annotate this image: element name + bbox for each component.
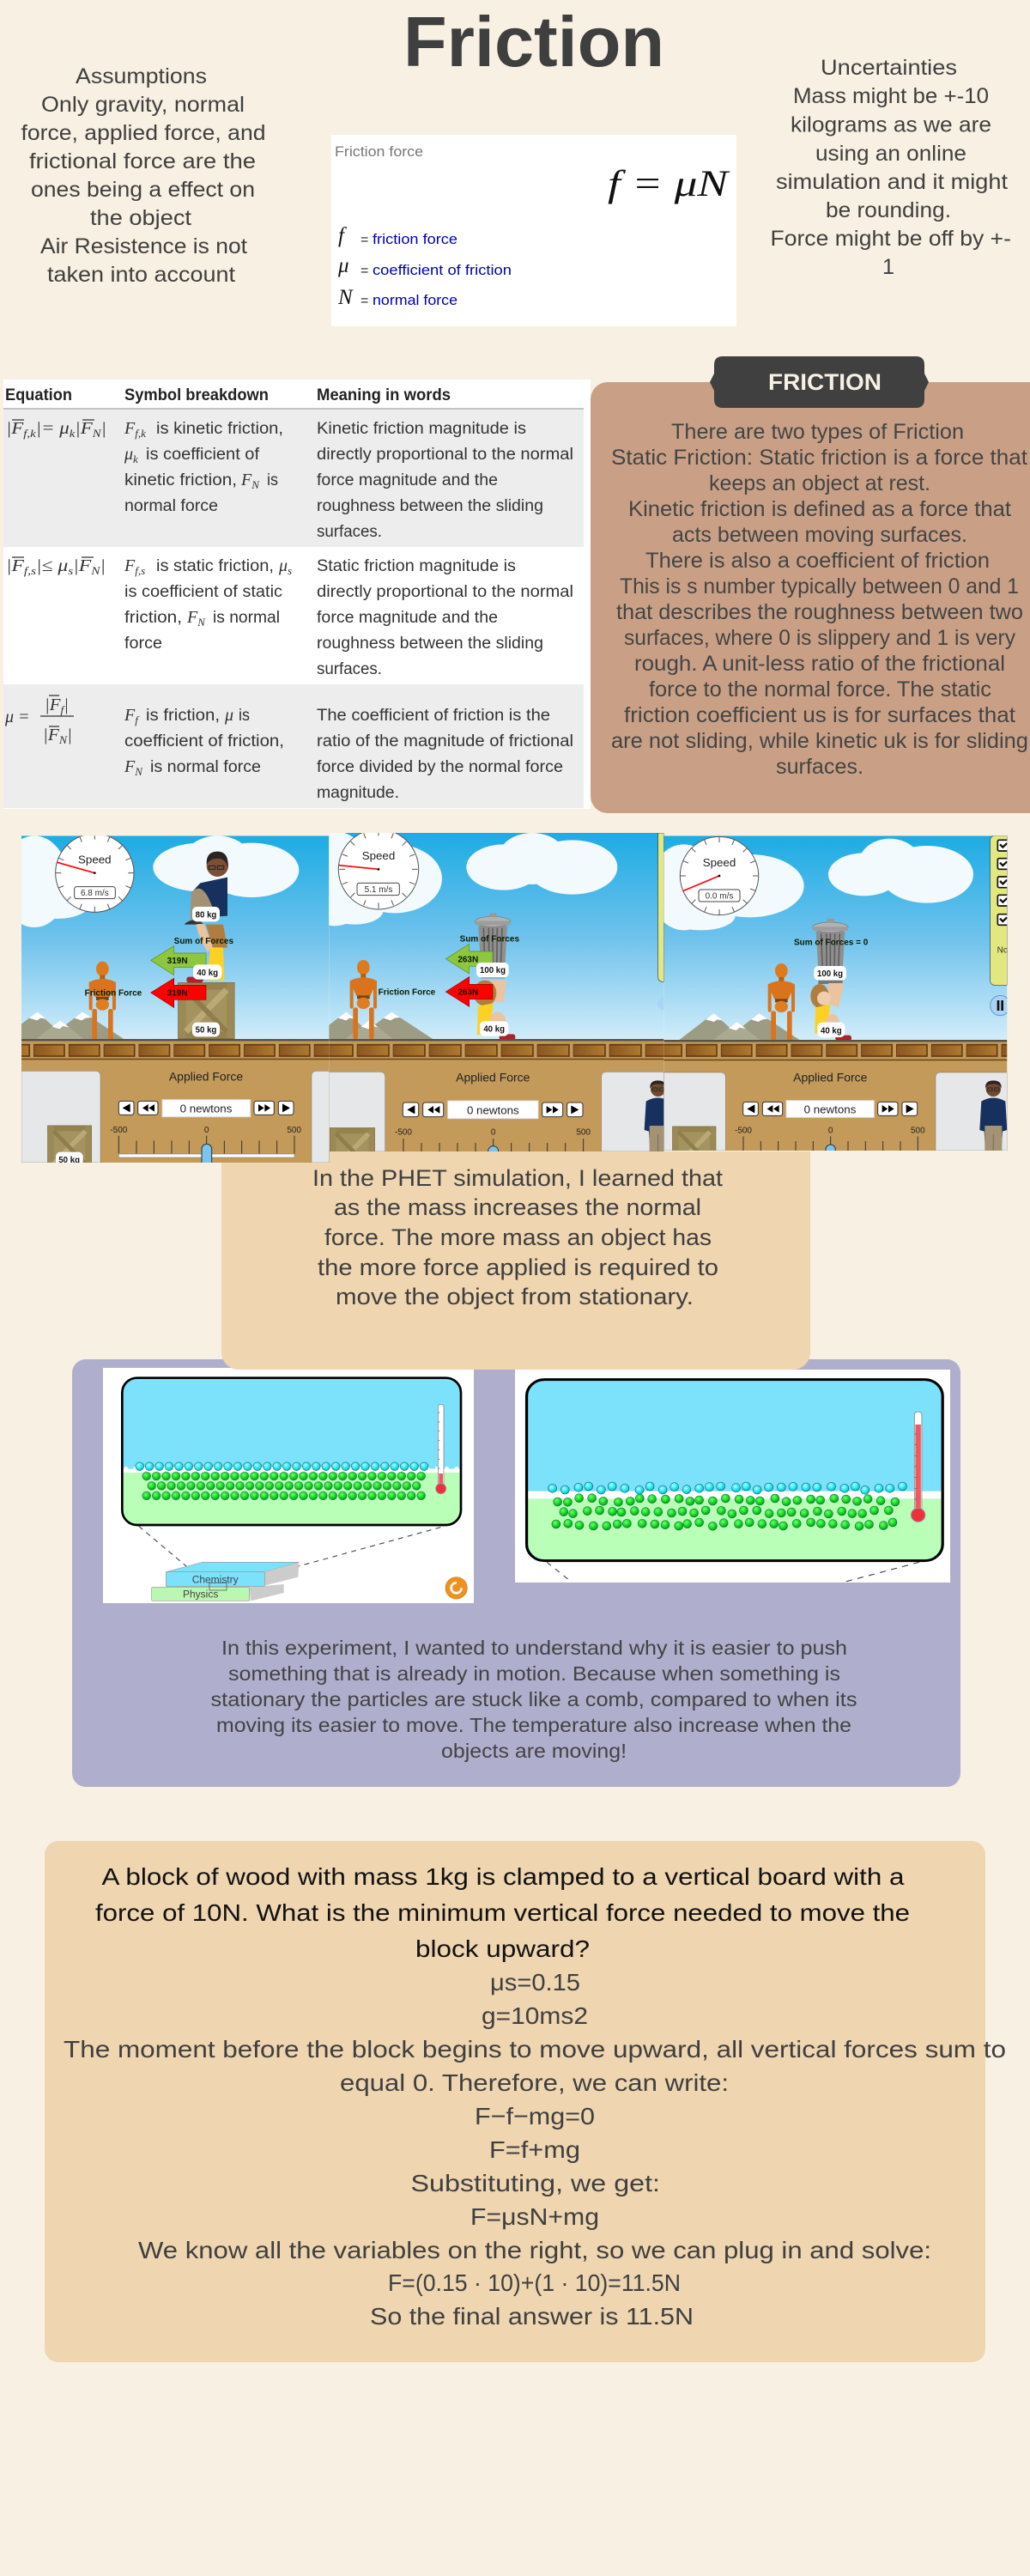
table header xyxy=(5,386,451,404)
row: static friction: friction, xyxy=(124,609,182,627)
row: static friction: N xyxy=(197,616,206,629)
text block: assumptions: frictional force are the xyxy=(29,149,256,173)
legend: mu: μ xyxy=(337,254,349,277)
text block: uncertainties: be rounding. xyxy=(826,198,951,222)
row: static friction: s xyxy=(68,564,73,577)
friction force arrow xyxy=(85,978,206,1007)
figure: seated girl xyxy=(186,924,227,982)
table header: Symbol breakdown xyxy=(124,386,269,404)
text block: assumptions: Air Resistence is not xyxy=(40,234,247,258)
row: static friction: directly proportional to the normal xyxy=(317,583,573,601)
books: chemistry and physics xyxy=(152,1562,299,1601)
text block: assumptions: ones being a effect on xyxy=(31,178,255,202)
mass labels xyxy=(192,907,221,1036)
legend: N xyxy=(337,286,457,309)
row: kinetic friction: is xyxy=(267,471,278,489)
sum of forces arrow: Sum of Forces xyxy=(174,937,233,946)
row: kinetic friction: N xyxy=(92,427,102,440)
green particles xyxy=(552,1494,900,1530)
legend: f: f xyxy=(338,224,347,247)
row: kinetic friction: normal force xyxy=(124,497,218,515)
simulation screenshot 2: trash can and girl, moving xyxy=(329,833,664,1151)
row: coefficient of friction: N xyxy=(58,733,69,746)
control deck: 500 xyxy=(911,1126,925,1135)
explanation text: surfaces, where 0 is slippery and 1 is very xyxy=(624,626,1015,650)
trash can xyxy=(813,919,848,984)
books: chemistry and physics: Chemistry xyxy=(192,1574,239,1586)
mountains xyxy=(329,1012,433,1041)
explanation text: that describes the roughness between two xyxy=(616,600,1023,624)
ground and bricks xyxy=(21,1039,329,1061)
row: static friction: | xyxy=(100,556,106,575)
mannequin: friction pusher xyxy=(89,962,116,1041)
takeaway text: In the PHET simulation, I learned that xyxy=(312,1165,724,1191)
chamber: still particles xyxy=(122,1378,461,1525)
text block: assumptions: taken into account xyxy=(47,263,235,287)
speed gauge: Speed xyxy=(78,854,112,866)
explanation text: friction coefficient us is for surfaces that xyxy=(624,703,1015,727)
solution steps: g=10ms2 xyxy=(482,2002,588,2029)
mountains xyxy=(680,1013,800,1040)
formula caption: Friction force xyxy=(335,143,423,160)
row: coefficient of friction: ratio of the magnitude of frictional xyxy=(317,732,573,750)
row: static friction: F xyxy=(124,556,135,575)
row: static friction: roughness between the sliding xyxy=(317,635,543,653)
solution steps: The moment before the block begins to move upward, all vertical forces sum to xyxy=(64,2036,1006,2063)
panel: particle experiment xyxy=(72,1359,960,1787)
title: Friction xyxy=(403,2,664,82)
legend: f: friction force xyxy=(373,231,457,247)
mass labels: 100 kg xyxy=(817,969,843,979)
row: coefficient of friction: μ xyxy=(224,706,233,725)
panel: PHET simulation takeaway xyxy=(221,1151,810,1370)
row: kinetic friction: N xyxy=(251,478,260,491)
row: kinetic friction: force magnitude and the xyxy=(317,471,498,489)
row: static friction: s xyxy=(288,564,292,577)
text block: uncertainties: 1 xyxy=(882,255,894,279)
pause button xyxy=(991,995,1010,1016)
legend: N: normal force xyxy=(373,292,457,308)
row: kinetic friction: is coefficient of xyxy=(146,446,260,464)
legend: N: = xyxy=(360,294,368,308)
sum of forces label: Sum of Forces = 0 xyxy=(794,939,869,948)
control deck: -500 xyxy=(110,1126,128,1135)
row: kinetic friction: |= μ xyxy=(36,419,70,438)
row: kinetic friction: k xyxy=(133,453,138,465)
friction force arrow: Friction Force xyxy=(379,988,436,998)
legend: mu xyxy=(337,254,512,278)
text block: assumptions xyxy=(21,64,266,287)
speed gauge xyxy=(338,829,419,909)
row: kinetic friction: roughness between the sliding xyxy=(317,497,543,515)
figure: seated man xyxy=(185,852,228,925)
clouds xyxy=(650,839,973,930)
row: static friction xyxy=(6,556,573,678)
text block: uncertainties: Mass might be +-10 xyxy=(793,84,989,108)
icon: reset button xyxy=(445,1577,467,1599)
control deck: 0 xyxy=(491,1128,496,1138)
crate xyxy=(178,982,234,1039)
experiment text: moving its easier to move. The temperature also increase when the xyxy=(216,1714,851,1736)
row: kinetic friction: kinetic friction, xyxy=(124,471,237,489)
control deck: -500 xyxy=(735,1126,752,1135)
mass labels: 40 kg xyxy=(821,1026,842,1036)
trash can xyxy=(475,913,511,978)
row: static friction: Static friction magnitude is xyxy=(317,557,516,575)
experiment text: something that is already in motion. Because when something is xyxy=(228,1662,840,1685)
friction force arrow: Friction Force xyxy=(85,989,142,999)
control deck: Applied Force xyxy=(793,1070,868,1084)
row: kinetic friction: μ xyxy=(124,445,133,464)
clouds xyxy=(329,833,618,926)
control deck xyxy=(21,1060,329,1170)
speed gauge: 5.1 m/s xyxy=(365,885,392,895)
explanation text: acts between moving surfaces. xyxy=(672,523,967,547)
row: coefficient of friction: is normal force xyxy=(150,758,261,776)
text block: uncertainties: simulation and it might xyxy=(776,170,1008,194)
text block: uncertainties: Uncertainties xyxy=(821,56,957,80)
row: coefficient of friction: force divided by the normal force xyxy=(317,758,563,776)
row: kinetic friction: is kinetic friction, xyxy=(156,420,283,438)
explanation text: are not sliding, while kinetic uk is for sliding xyxy=(611,729,1028,753)
mass labels: 40 kg xyxy=(483,1025,505,1035)
control deck: 0 newtons xyxy=(467,1103,519,1116)
control strip edge xyxy=(657,833,664,1010)
explanation text xyxy=(611,420,1028,779)
row: coefficient of friction: |F xyxy=(43,726,58,744)
solution steps: equal 0. Therefore, we can write: xyxy=(340,2069,729,2096)
solution steps: F=f+mg xyxy=(489,2136,580,2163)
solution steps: Substituting, we get: xyxy=(410,2170,660,2196)
row: coefficient of friction: magnitude. xyxy=(317,784,399,802)
speed gauge: 6.8 m/s xyxy=(81,889,109,898)
control deck: 0 xyxy=(204,1126,209,1135)
control deck: 0 newtons xyxy=(804,1103,857,1115)
control deck: 0 xyxy=(828,1126,833,1135)
diagram: moving particles xyxy=(515,1370,950,1583)
mass labels: 50 kg xyxy=(196,1026,216,1036)
explanation text: Kinetic friction is defined as a force that xyxy=(628,497,1011,521)
control panel: force options: No xyxy=(997,946,1009,956)
solution steps: So the final answer is 11.5N xyxy=(370,2303,694,2330)
row: kinetic friction: surfaces. xyxy=(317,523,382,541)
figure: seated girl xyxy=(810,983,851,1041)
row: kinetic friction: f,k xyxy=(135,427,146,440)
control deck: 500 xyxy=(576,1128,591,1138)
row: coefficient of friction: F xyxy=(124,757,135,776)
row: kinetic friction: | xyxy=(101,419,106,438)
row: kinetic friction: f,k xyxy=(23,427,36,440)
main formula: f = μN xyxy=(608,164,730,204)
row: kinetic friction: Kinetic friction magnitude is xyxy=(317,420,526,438)
speed gauge: Speed xyxy=(703,856,736,869)
table header: Equation xyxy=(5,386,72,404)
text block: assumptions: the object xyxy=(90,206,191,230)
control deck: -500 xyxy=(395,1128,412,1138)
row: kinetic friction: F xyxy=(241,471,251,489)
books: chemistry and physics: Physics xyxy=(183,1588,218,1600)
speed gauge: 0.0 m/s xyxy=(706,891,733,901)
row: static friction: surfaces. xyxy=(317,660,382,678)
row: static friction: force magnitude and the xyxy=(317,609,498,627)
control deck: Applied Force xyxy=(456,1070,530,1084)
speed gauge xyxy=(680,836,759,915)
panel: friction force formula xyxy=(331,135,736,326)
problem statement: block upward? xyxy=(415,1935,590,1962)
solution steps: F=μsN+mg xyxy=(470,2203,599,2230)
row: static friction: |F xyxy=(6,556,21,575)
row: coefficient of friction: The coefficient of friction is the xyxy=(317,707,550,725)
explanation text: keeps an object at rest. xyxy=(709,471,930,495)
mass labels: 40 kg xyxy=(197,969,218,978)
control deck: 500 xyxy=(287,1126,301,1135)
text block: assumptions: Assumptions xyxy=(76,64,207,88)
row: static friction: f,s xyxy=(135,564,145,577)
row: kinetic friction: |F xyxy=(6,419,21,438)
row: coefficient of friction: N xyxy=(134,765,143,778)
explanation text: rough. A unit-less ratio of the frictional xyxy=(634,652,1005,676)
solution steps: F−f−mg=0 xyxy=(475,2103,595,2129)
friction force arrow: 319N xyxy=(167,989,188,999)
dashed zoom lines xyxy=(139,1526,440,1582)
control deck: Applied Force xyxy=(169,1069,243,1083)
ground and bricks xyxy=(663,1040,1007,1062)
experiment text: stationary the particles are stuck like a comb, compared to when its xyxy=(211,1688,857,1710)
takeaway text: the more force applied is required to xyxy=(318,1255,718,1280)
row: kinetic friction xyxy=(6,419,573,541)
explanation text: This is s number typically between 0 and 1 xyxy=(620,574,1019,598)
row: kinetic friction: k xyxy=(70,427,76,440)
friction badge xyxy=(710,356,929,408)
row: static friction: is coefficient of static xyxy=(124,583,282,601)
sum of forces arrow: Sum of Forces xyxy=(460,934,519,944)
row: static friction: N xyxy=(90,564,101,577)
explanation text: There are two types of Friction xyxy=(671,420,964,444)
takeaway text: as the mass increases the normal xyxy=(334,1194,701,1220)
legend: f xyxy=(338,224,457,247)
friction force arrow: 263N xyxy=(457,988,478,998)
mannequin: friction pusher xyxy=(768,963,795,1042)
panel: friction explanation xyxy=(591,356,1030,813)
friction force arrow xyxy=(379,977,493,1006)
row: coefficient of friction: f xyxy=(135,714,140,726)
table header: Meaning in words xyxy=(317,386,451,404)
control deck: 50 kg xyxy=(58,1156,80,1165)
row: static friction: F xyxy=(187,608,197,627)
row: static friction: is normal xyxy=(213,609,280,627)
solution steps: We know all the variables on the right, so we can plug in and solve: xyxy=(138,2237,931,2263)
text block: assumptions: force, applied force, and xyxy=(21,121,266,145)
row: static friction: f,s xyxy=(24,564,36,577)
row: coefficient of friction: | xyxy=(64,696,69,714)
row: kinetic friction: |F xyxy=(75,419,94,438)
control deck xyxy=(329,1060,664,1151)
control deck xyxy=(663,1060,1008,1151)
row: coefficient of friction: coefficient of friction, xyxy=(124,732,284,750)
row: static friction: force xyxy=(124,635,162,653)
simulation screenshot 1: crate with 80 kg and 40 kg xyxy=(0,834,329,1170)
panel: worked problem xyxy=(45,1841,1006,2362)
problem statement: force of 10N. What is the minimum vertical force needed to move the xyxy=(95,1899,910,1926)
speed gauge xyxy=(56,834,134,912)
legend: f: = xyxy=(360,233,368,247)
friction badge: FRICTION xyxy=(768,369,882,395)
thermometer: low temperature xyxy=(436,1404,446,1494)
explanation text: Static Friction: Static friction is a force that xyxy=(611,446,1027,470)
mass labels: 100 kg xyxy=(480,966,506,975)
clouds xyxy=(0,835,299,927)
row: static friction: |≤ μ xyxy=(36,556,68,575)
solution steps: μs=0.15 xyxy=(490,1969,580,1996)
control deck: 0 newtons xyxy=(180,1103,233,1115)
legend: mu: = xyxy=(360,264,368,278)
figure: seated girl xyxy=(474,981,515,1040)
panel: equation table xyxy=(3,380,591,809)
legend: mu: coefficient of friction xyxy=(373,262,512,278)
row: static friction: |F xyxy=(73,556,92,575)
cyan particles xyxy=(548,1482,906,1494)
mass labels: 80 kg xyxy=(196,911,216,920)
thermometer: high temperature xyxy=(911,1412,925,1522)
explanation text: force to the normal force. The static xyxy=(649,677,991,702)
problem statement xyxy=(95,1863,910,1962)
row: coefficient of friction: is friction, xyxy=(146,707,220,725)
row: coefficient of friction: μ = xyxy=(4,708,30,726)
mountains xyxy=(21,1012,124,1039)
row: kinetic friction: directly proportional to the normal xyxy=(317,446,573,464)
ground and bricks xyxy=(326,1039,663,1061)
experiment text: In this experiment, I wanted to understand why it is easier to push xyxy=(221,1637,847,1659)
diagram: stationary particles xyxy=(103,1368,474,1603)
text block: uncertainties xyxy=(771,56,1011,279)
speed gauge: Speed xyxy=(362,849,395,862)
row: static friction: is static friction, xyxy=(156,557,274,575)
explanation text: There is also a coefficient of friction xyxy=(645,549,990,573)
row: coefficient of friction: F xyxy=(124,706,135,725)
sum of forces arrow xyxy=(151,937,233,975)
solution steps xyxy=(64,1969,1006,2330)
control panel: force options xyxy=(990,835,1008,986)
row: kinetic friction: F xyxy=(124,419,135,438)
dashed zoom lines xyxy=(547,1562,919,1583)
text block: uncertainties: kilograms as we are xyxy=(791,113,991,137)
problem statement: A block of wood with mass 1kg is clamped to a vertical board with a xyxy=(101,1863,905,1890)
row: coefficient of friction: | xyxy=(67,726,72,744)
mass labels xyxy=(476,963,509,1036)
text block: uncertainties: using an online xyxy=(815,142,966,166)
mannequin: friction pusher xyxy=(350,960,377,1039)
mass labels xyxy=(814,966,846,1037)
simulation screenshot 3: stationary, sum of forces zero xyxy=(663,835,1008,1151)
legend: N: N xyxy=(337,286,354,309)
takeaway text xyxy=(312,1165,724,1309)
sum of forces arrow: 263N xyxy=(457,955,478,964)
row: coefficient of friction: |F xyxy=(45,696,60,714)
takeaway text: move the object from stationary. xyxy=(336,1284,694,1309)
sum of forces arrow: 319N xyxy=(167,957,188,966)
sum of forces arrow xyxy=(445,934,519,974)
experiment text xyxy=(211,1637,857,1762)
text block: assumptions: Only gravity, normal xyxy=(41,93,245,117)
explanation text: surfaces. xyxy=(776,755,863,779)
solution steps: F=(0.15 · 10)+(1 · 10)=11.5N xyxy=(388,2269,681,2296)
row: coefficient of friction xyxy=(4,696,573,802)
text block: uncertainties: Force might be off by +- xyxy=(771,227,1011,251)
row: coefficient of friction: is xyxy=(239,707,250,725)
row: coefficient of friction: f xyxy=(60,703,66,716)
experiment text: objects are moving! xyxy=(441,1740,627,1762)
row: static friction: μ xyxy=(279,556,288,575)
takeaway text: force. The more mass an object has xyxy=(324,1224,712,1250)
chamber: agitated particles xyxy=(527,1380,942,1561)
